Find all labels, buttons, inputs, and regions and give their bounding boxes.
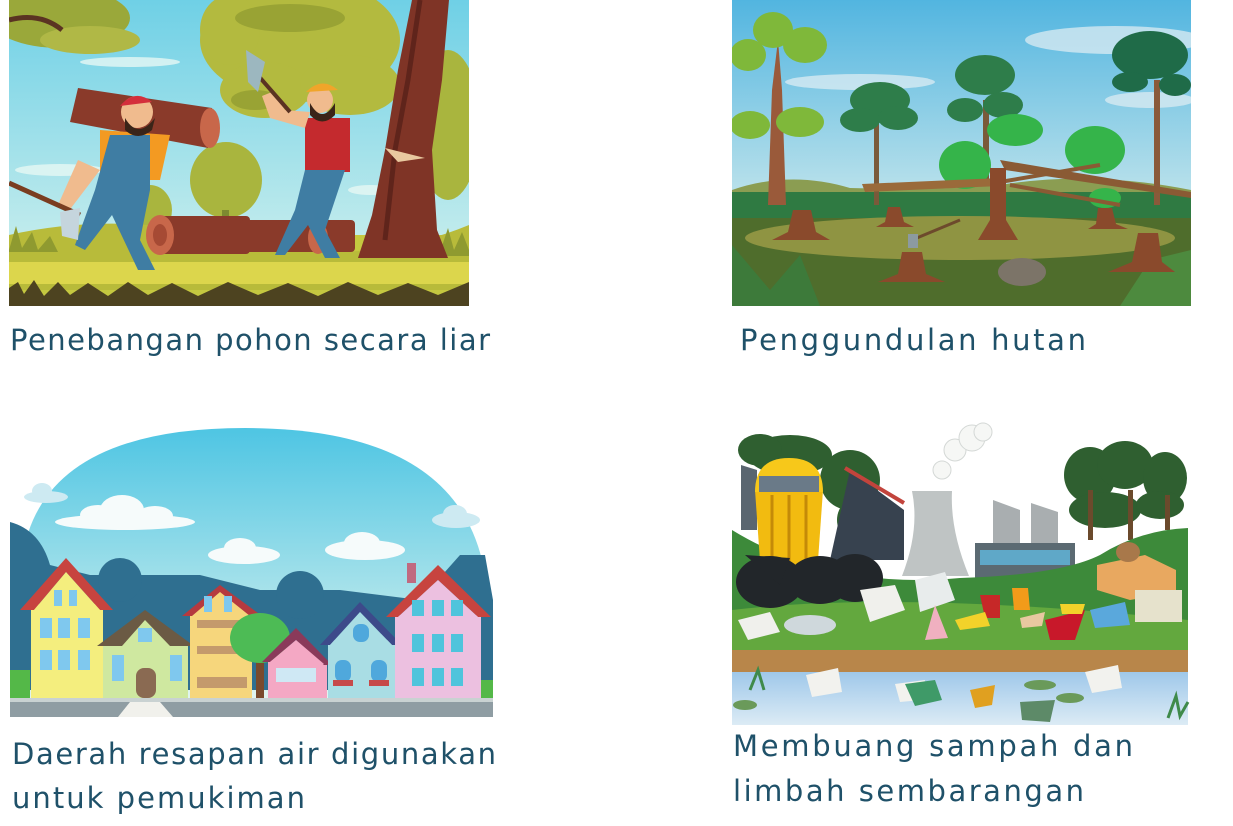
illustration: deforestation (730, 0, 1205, 306)
illustration: illegal logging (0, 0, 480, 306)
scattered rubbish (738, 572, 1130, 640)
caption: illegal logging: Penebangan pohon secara liar (10, 323, 490, 357)
standing trees (730, 12, 827, 205)
river (732, 672, 1188, 725)
factory (975, 500, 1075, 580)
background trees (738, 434, 1187, 546)
carried log (70, 88, 220, 148)
grass band and ground (732, 192, 1191, 218)
fallen trees (862, 114, 1191, 208)
pink small house (262, 628, 332, 698)
rubbish in water (733, 665, 1188, 722)
green hills (732, 528, 1188, 655)
caption: housing on water catchment area: untuk pemukiman (12, 781, 305, 815)
lumberjack left (9, 96, 170, 270)
caption: littering and waste dumping: limbah sembarangan (733, 774, 1084, 808)
yellow trash bin (755, 458, 823, 575)
cooling tower and smoke (902, 491, 969, 576)
soil bank (732, 650, 1188, 676)
tree foliage centre (200, 0, 400, 118)
black garbage bags (736, 554, 883, 608)
yellow house (20, 558, 113, 698)
tree stumps (772, 168, 1175, 282)
tree (230, 613, 290, 698)
caption: littering and waste dumping (733, 729, 1133, 808)
big tree trunk (358, 0, 449, 258)
blue house (320, 602, 402, 698)
orange house (182, 585, 262, 698)
illustration: housing on water catchment area (10, 428, 493, 717)
road (10, 698, 493, 717)
cardboard boxes and rat (1097, 542, 1182, 622)
caption: deforestation: Penggundulan hutan (740, 323, 1086, 357)
background forest (10, 522, 493, 690)
distant hills (732, 178, 1191, 192)
illustration: littering and waste dumping (732, 423, 1188, 725)
lumberjack right (246, 50, 350, 258)
clouds (55, 495, 405, 564)
green house (97, 610, 194, 698)
pink tall house (386, 563, 491, 698)
factory buildings (741, 465, 757, 530)
axe and rock (912, 220, 960, 240)
tree foliage left (0, 0, 140, 54)
logs on the ground (146, 215, 355, 255)
caption: littering and waste dumping: Membuang sampah dan (733, 729, 1133, 763)
caption: housing on water catchment area: Daerah resapan air digunakan (12, 737, 496, 771)
caption: housing on water catchment area (12, 737, 496, 815)
ground (22, 235, 450, 296)
